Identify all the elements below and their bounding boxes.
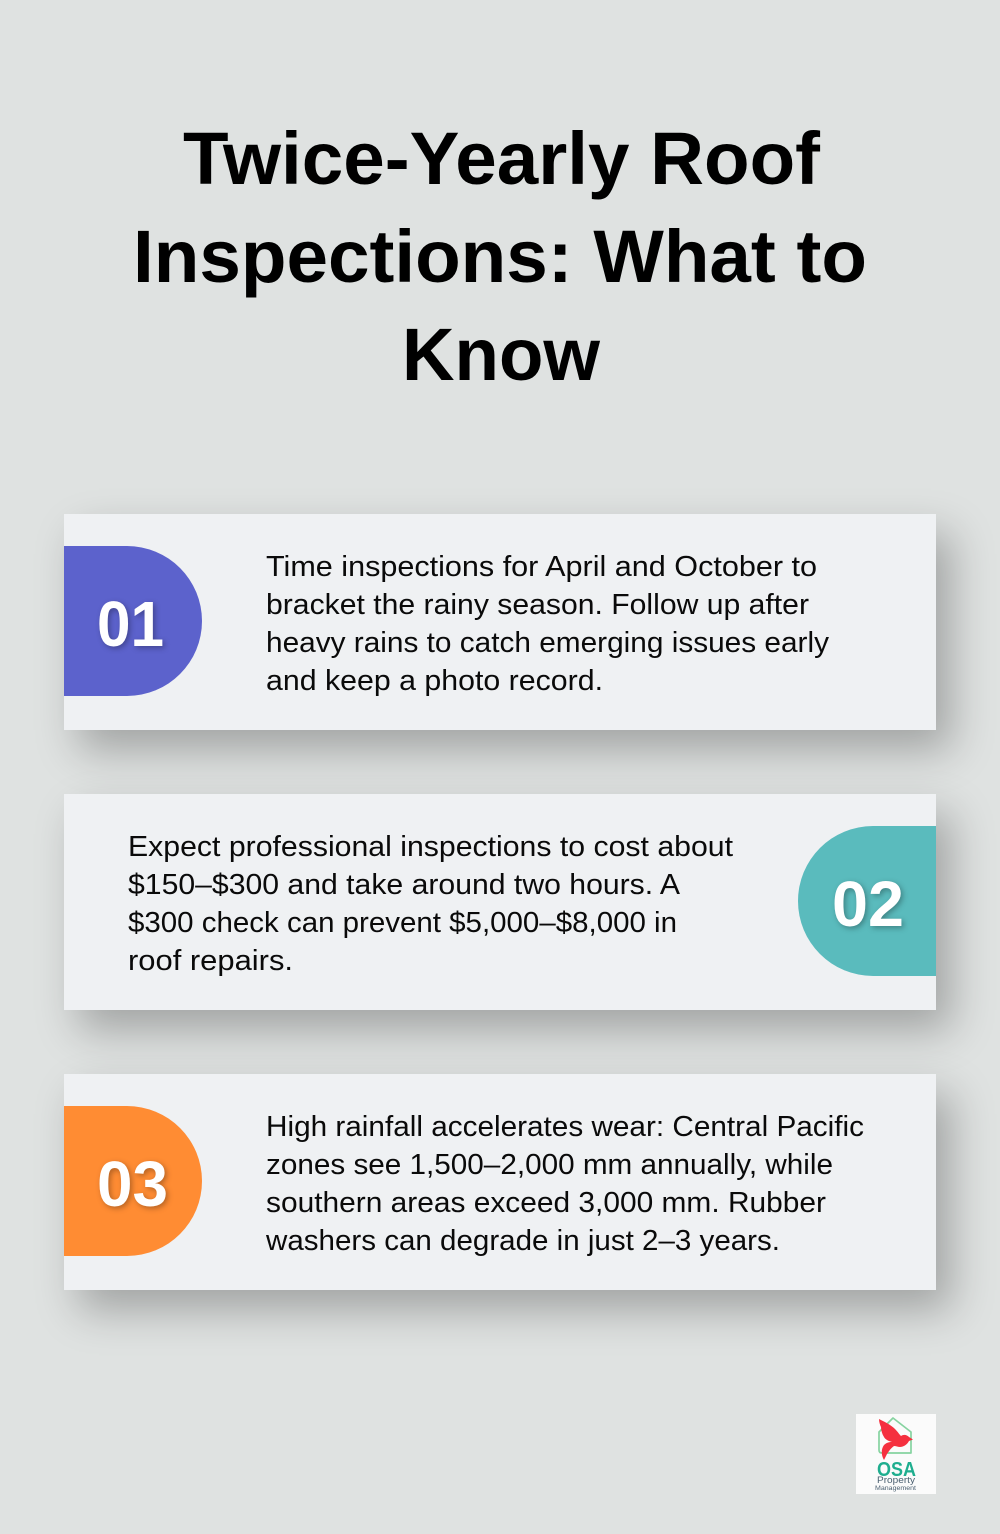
text: cost advice: roof repairs. bbox=[128, 945, 293, 977]
title: Inspections: What to bbox=[133, 215, 867, 298]
text: cost advice: $300 check can prevent $5,000–$8,000 in bbox=[128, 907, 677, 939]
title: Twice-Yearly Roof bbox=[183, 117, 820, 200]
logo: OSA Property Management bbox=[856, 1414, 936, 1494]
panel: step 01 bbox=[64, 514, 936, 730]
text: timing advice: bracket the rainy season. Follow up after bbox=[266, 589, 809, 621]
text: Property: Property bbox=[877, 1475, 916, 1485]
text: cost advice: Expect professional inspections to cost about bbox=[128, 831, 733, 863]
badge: 01: 01 bbox=[97, 588, 164, 660]
icon: house outline bbox=[879, 1418, 911, 1453]
text: rainfall advice: southern areas exceed 3,000 mm. Rubber bbox=[266, 1187, 826, 1219]
panel: step 02 bbox=[64, 794, 936, 1010]
badge: 02 bbox=[798, 826, 936, 976]
text: OSA: OSA bbox=[877, 1459, 916, 1481]
text: rainfall advice: zones see 1,500–2,000 mm annually, while bbox=[266, 1149, 833, 1181]
badge: 01 bbox=[64, 546, 202, 696]
text: timing advice: heavy rains to catch emerging issues early bbox=[266, 627, 830, 659]
badge: 02: 02 bbox=[832, 868, 904, 940]
text: Management: Management bbox=[875, 1486, 916, 1492]
icon: red bird bbox=[879, 1419, 913, 1460]
badge: 03 bbox=[64, 1106, 202, 1256]
text: cost advice bbox=[128, 831, 733, 977]
panel: step 03 bbox=[64, 1074, 936, 1290]
title bbox=[133, 117, 867, 396]
text: rainfall advice: High rainfall accelerates wear: Central Pacific bbox=[266, 1111, 864, 1143]
text: timing advice: Time inspections for April and October to bbox=[266, 551, 817, 583]
text: timing advice bbox=[266, 551, 830, 697]
text: rainfall advice bbox=[265, 1111, 864, 1257]
text: timing advice: and keep a photo record. bbox=[266, 665, 603, 697]
badge: 03: 03 bbox=[97, 1148, 168, 1220]
text: rainfall advice: washers can degrade in just 2–3 years. bbox=[265, 1225, 780, 1257]
text: cost advice: $150–$300 and take around two hours. A bbox=[128, 869, 681, 901]
title: Know bbox=[402, 313, 600, 396]
